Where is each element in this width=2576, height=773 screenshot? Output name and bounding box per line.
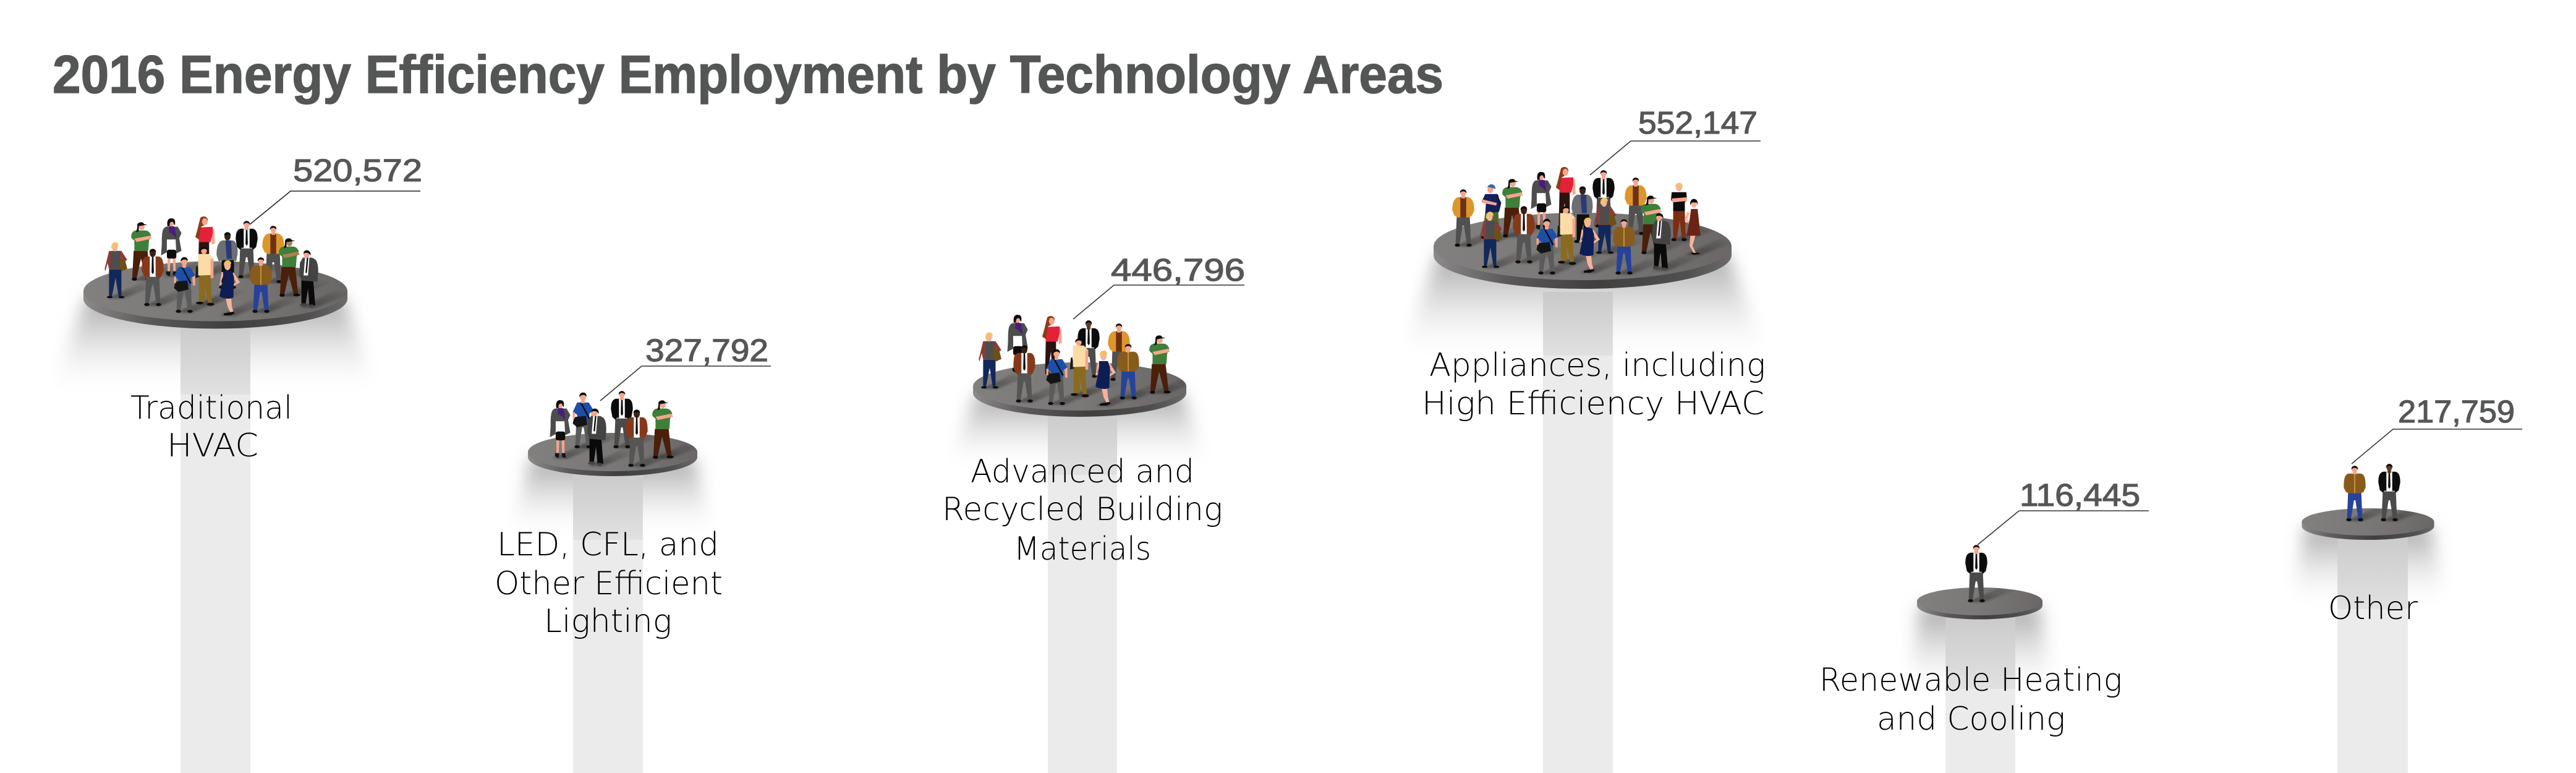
leader line xyxy=(1590,141,1761,175)
column shading xyxy=(181,322,250,395)
label: Other Efficient xyxy=(495,565,723,602)
panel: Advanced and Recycled Building Materials xyxy=(942,252,1245,773)
shadow xyxy=(512,458,712,531)
panel: Appliances, including High Efficiency HVAC xyxy=(1404,105,1766,773)
platform xyxy=(2302,508,2434,540)
column shading xyxy=(573,470,643,540)
leader line xyxy=(2352,429,2522,464)
shadow xyxy=(53,297,375,388)
column shading xyxy=(1543,292,1613,356)
foot shadows xyxy=(982,372,1201,406)
leader line xyxy=(1978,511,2149,545)
column xyxy=(1543,292,1613,773)
label: and Cooling xyxy=(1877,701,2065,738)
label: LED, CFL, and xyxy=(497,526,719,563)
foot shadows xyxy=(108,258,349,316)
value: 520,572 xyxy=(293,153,422,188)
label: Appliances, including xyxy=(1429,347,1766,384)
foot shadows xyxy=(1971,588,2010,604)
title: 2016 Energy Efficiency Employment by Technology Areas xyxy=(53,45,1443,105)
panel: Traditional HVAC xyxy=(53,153,422,773)
panel: LED, CFL, and Other Efficient Lighting xyxy=(495,333,771,773)
label xyxy=(1819,662,2122,738)
label xyxy=(130,390,292,464)
label: Advanced and xyxy=(971,453,1194,490)
shadow xyxy=(2293,526,2444,602)
label xyxy=(942,453,1223,568)
panel: Renewable Heating and Cooling xyxy=(1819,477,2149,773)
platform xyxy=(1434,213,1732,289)
column shading xyxy=(2337,532,2408,609)
label: Materials xyxy=(1014,531,1151,568)
label: Recycled Building xyxy=(942,491,1223,528)
shadow xyxy=(1404,254,1764,352)
column xyxy=(573,470,643,773)
column xyxy=(1048,408,1117,773)
value: 217,759 xyxy=(2398,394,2515,429)
platform xyxy=(973,362,1186,417)
foot shadows xyxy=(553,431,704,467)
people xyxy=(550,391,674,467)
leader line xyxy=(600,366,771,401)
foot shadows xyxy=(1456,218,1735,275)
label: Lighting xyxy=(544,603,672,640)
shadow xyxy=(950,393,1205,463)
column shading xyxy=(1048,408,1117,475)
person xyxy=(1965,545,1987,602)
value: 327,792 xyxy=(645,333,768,368)
label: Other xyxy=(2328,590,2418,627)
people xyxy=(1452,167,1701,275)
column xyxy=(1945,612,2015,773)
panel: Other xyxy=(2293,394,2522,773)
platform xyxy=(528,433,697,476)
leader line xyxy=(1073,285,1244,319)
people xyxy=(2344,464,2400,521)
foot shadows xyxy=(2348,508,2418,522)
label: Renewable Heating xyxy=(1819,662,2122,699)
value: 116,445 xyxy=(2020,477,2140,513)
label: Traditional xyxy=(130,390,292,427)
value: 552,147 xyxy=(1638,105,1758,140)
people xyxy=(104,216,318,315)
platform xyxy=(1917,587,2043,620)
column xyxy=(181,322,250,773)
value: 446,796 xyxy=(1111,252,1245,288)
platform xyxy=(83,261,347,328)
label: High Efficiency HVAC xyxy=(1422,385,1764,422)
column shading xyxy=(1945,612,2015,689)
label xyxy=(1422,347,1766,422)
people xyxy=(979,315,1171,406)
leader line xyxy=(250,191,420,224)
shadow xyxy=(1909,606,2051,689)
label: HVAC xyxy=(167,427,258,464)
column xyxy=(2337,532,2408,773)
label xyxy=(495,526,723,640)
